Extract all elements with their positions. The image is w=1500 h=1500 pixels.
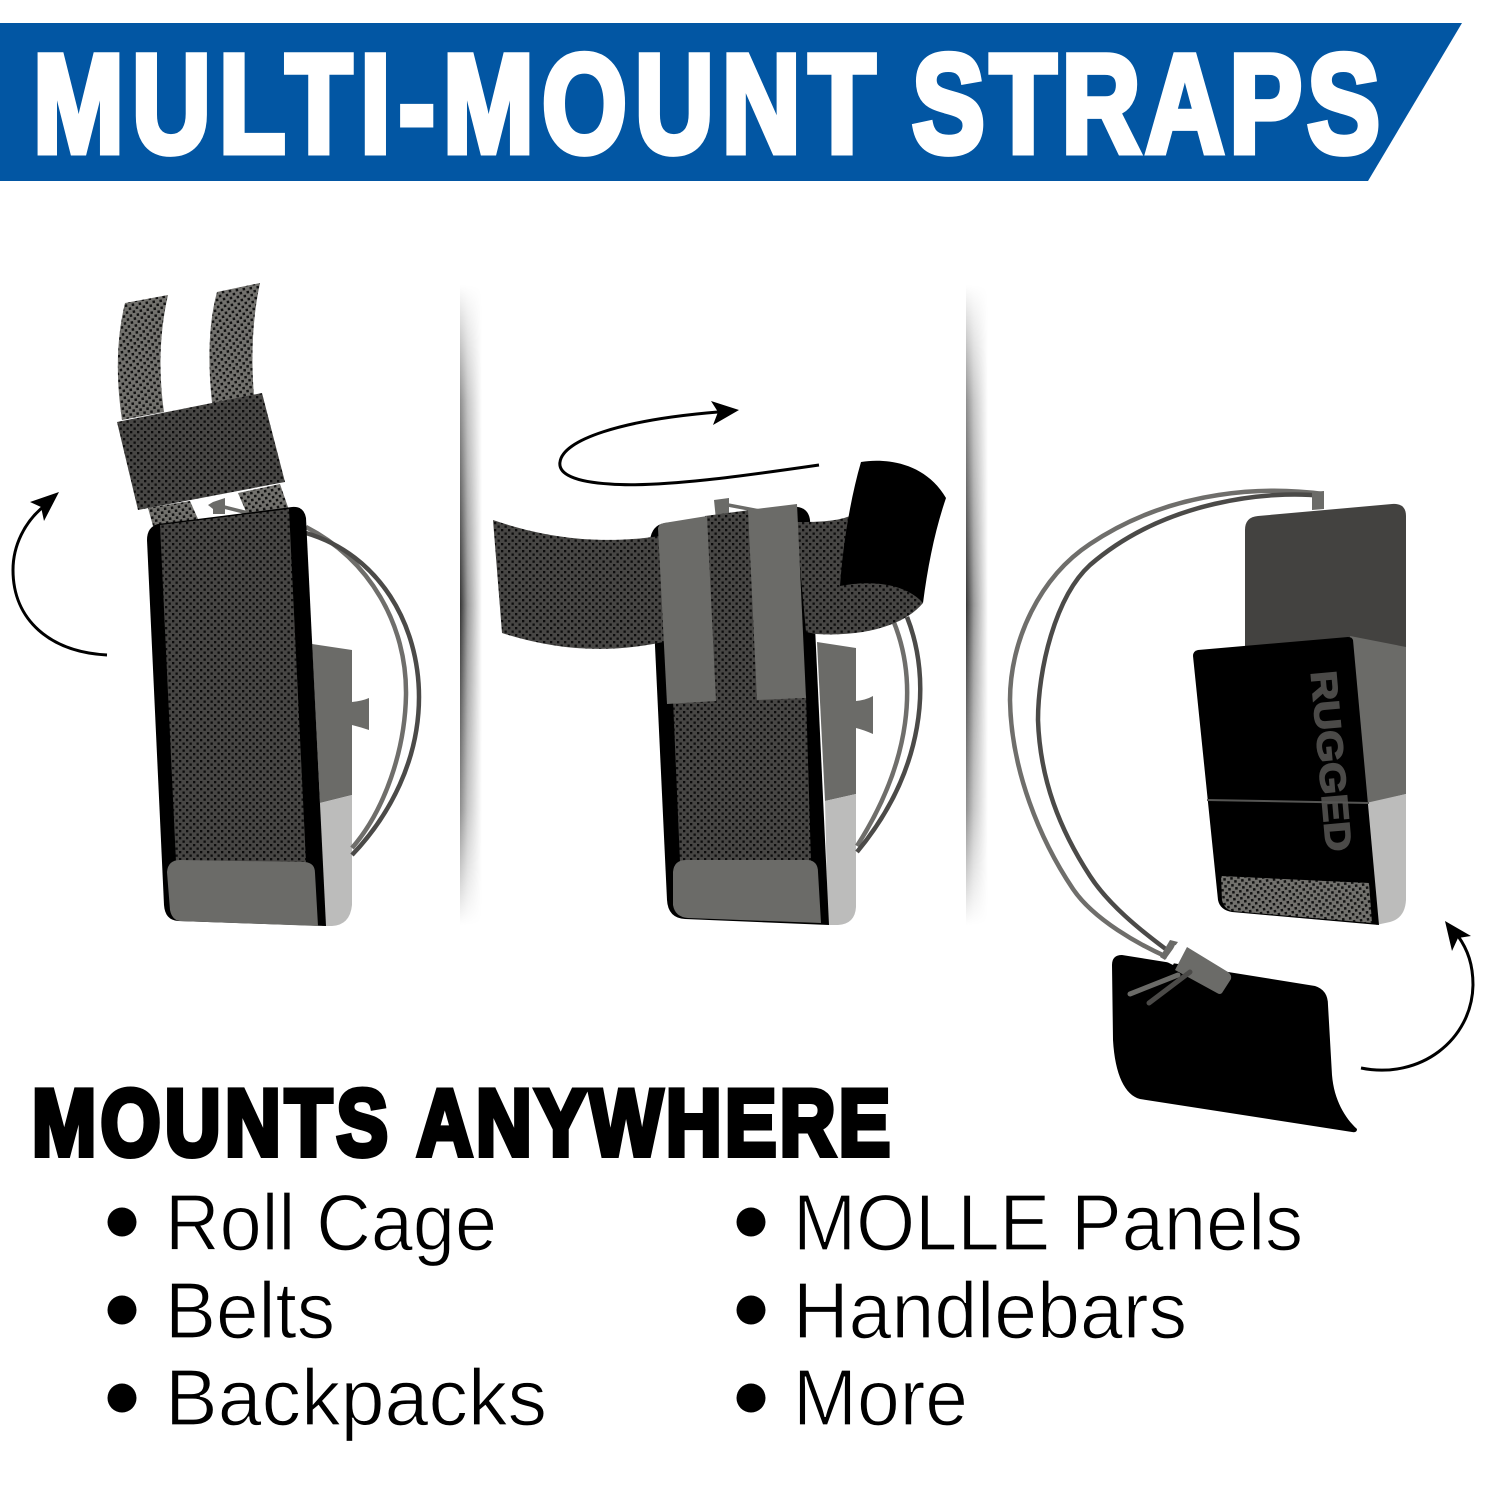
item: roll cage: Roll Cage: [165, 1178, 497, 1267]
panel divider shadow left: [460, 285, 482, 925]
panel: step 3 rear view: [1010, 491, 1406, 1132]
side of pouch: [817, 642, 873, 925]
heading: mounts anywhere: MOUNTS: [32, 1071, 388, 1176]
title text: [33, 25, 1380, 182]
side grey: [1350, 636, 1406, 804]
pouch front: [650, 507, 829, 925]
raised strap ends: [118, 283, 289, 526]
bottom pocket: [167, 860, 318, 926]
title text: MULTI-MOUNT: [33, 25, 875, 182]
black front: [1193, 637, 1379, 925]
arrow: step 1: [13, 492, 107, 655]
arrow: step 3: [1361, 921, 1473, 1070]
elastic cord: [306, 527, 419, 855]
black flap: [1112, 955, 1357, 1132]
heading: mounts anywhere: ANYWHERE: [417, 1071, 890, 1176]
pouch front: [147, 507, 326, 926]
panel: step 2 strap wrapped: [493, 461, 946, 925]
clip: [714, 498, 765, 520]
elastic cord: [1010, 491, 1323, 957]
bottom pocket: [673, 860, 821, 923]
seam line: [1207, 800, 1369, 803]
title text: STRAPS: [912, 25, 1380, 182]
arrow: step 2: [560, 401, 819, 485]
grey strips: [658, 504, 806, 704]
title banner: [0, 23, 1462, 182]
list: right column: [736, 1178, 1303, 1442]
panel divider shadow right: [966, 285, 988, 925]
strap fold: [117, 393, 285, 510]
mesh panel: [160, 509, 306, 862]
mesh strip: [1221, 876, 1372, 923]
item: more: More: [793, 1353, 968, 1442]
side light: [1366, 794, 1406, 925]
back plate: [1245, 504, 1406, 650]
buckle: [1130, 940, 1231, 1003]
panel: step 1 strap lifted: [117, 283, 419, 926]
list: left column: [108, 1178, 547, 1442]
item: molle panels: MOLLE Panels: [793, 1178, 1303, 1267]
item: backpacks: Backpacks: [165, 1353, 547, 1442]
black strap end: [840, 461, 946, 603]
heading: mounts anywhere: [32, 1071, 890, 1176]
RUGGED logo: RUGGED: [1303, 669, 1360, 853]
item: belts: Belts: [165, 1266, 335, 1355]
clip: [208, 498, 248, 514]
elastic cord: [857, 617, 920, 852]
right strap: [796, 516, 923, 634]
left strap: [493, 520, 672, 649]
mesh panel: [673, 695, 811, 862]
item: handlebars: Handlebars: [793, 1266, 1187, 1355]
side of pouch: [312, 644, 369, 926]
